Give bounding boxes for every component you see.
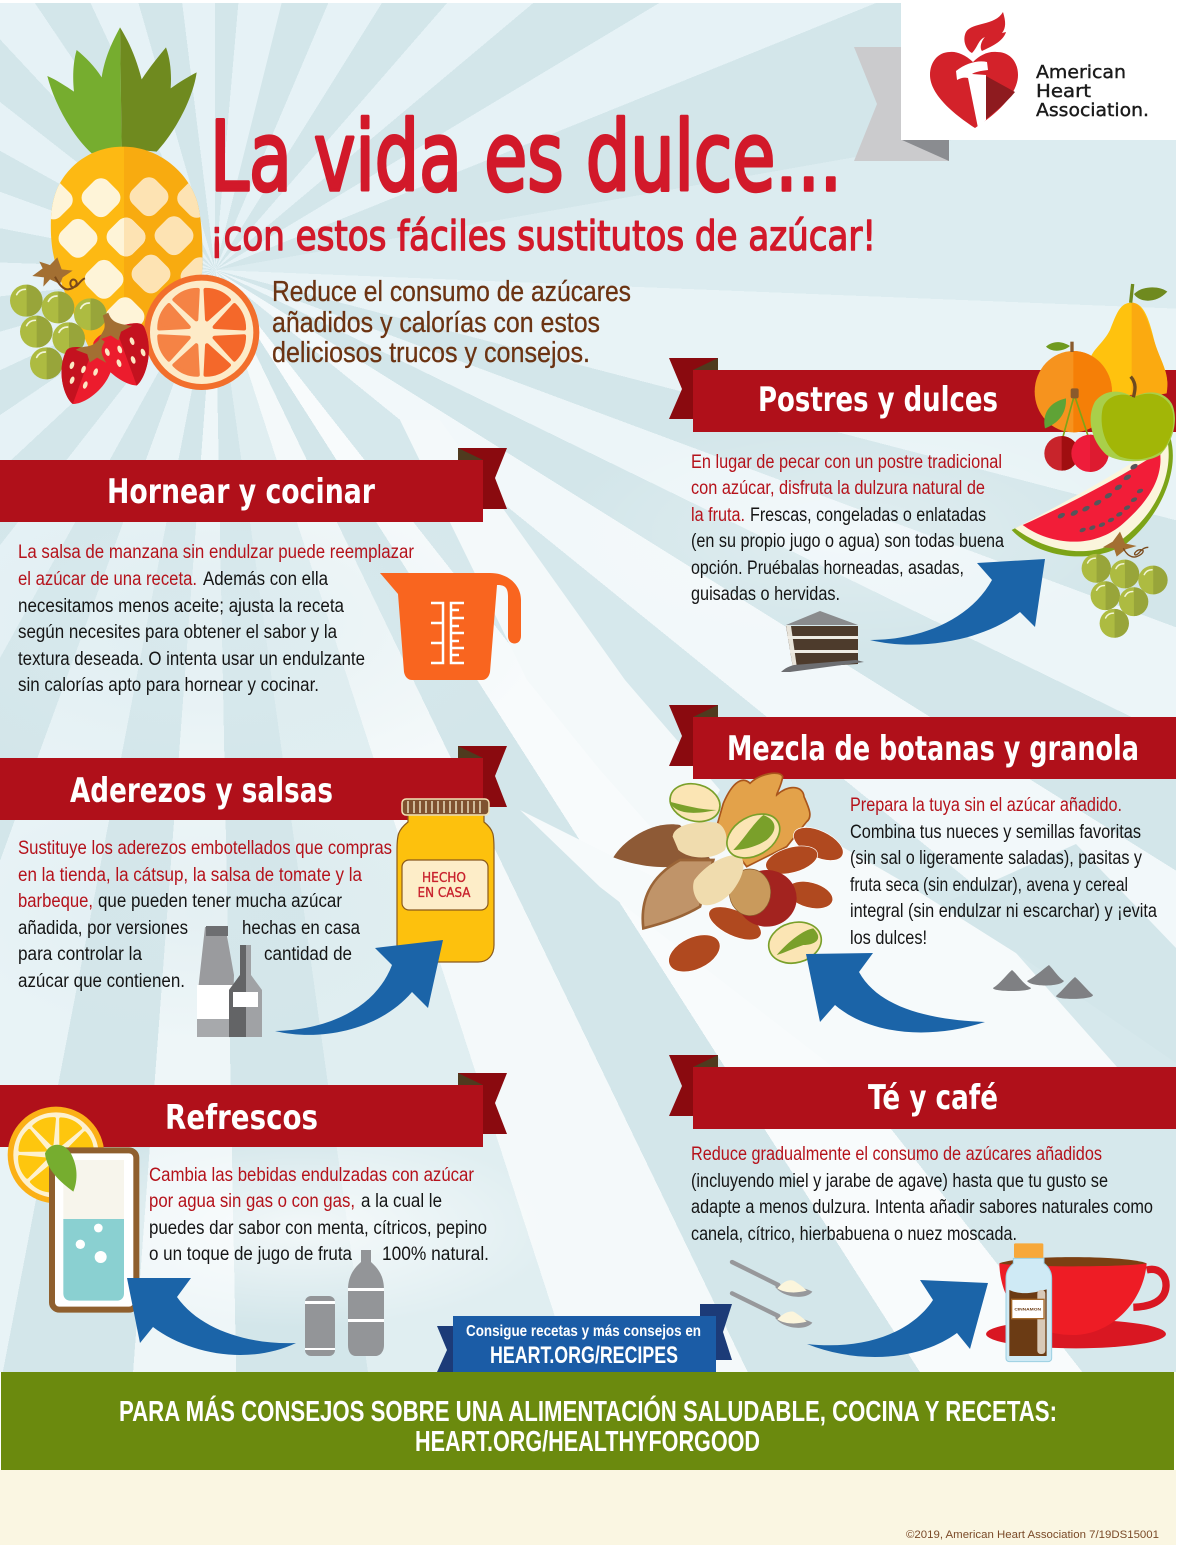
body text: textura deseada. O intenta usar un endulzante [18, 649, 365, 670]
subtitle: ¡con estos fáciles sustitutos de azúcar! [210, 212, 876, 260]
body text: (sin sal o ligeramente saladas), pasitas y [850, 848, 1142, 869]
body text [691, 452, 1004, 605]
cherries [1044, 388, 1109, 472]
icon: spoons of sugar [732, 1262, 812, 1328]
intro text: deliciosos trucos y consejos. [272, 337, 590, 369]
icon: measuring cup [380, 573, 521, 680]
callout: recipes badge: Consigue recetas y más consejos en [466, 1323, 701, 1340]
body text: guisadas o hervidas. [691, 584, 840, 605]
logo: American Heart Association: American [1036, 62, 1126, 83]
banner [669, 358, 1176, 432]
arrow [807, 1280, 988, 1357]
icon: homemade jar [397, 799, 494, 962]
panel: Té y café [669, 1055, 1176, 1362]
body text: en la tienda, la cátsup, la salsa de tomate y la [18, 865, 362, 886]
body text: la fruta. [691, 505, 745, 526]
icon: chocolate chips [993, 965, 1093, 999]
callout: recipes badge: HEART.ORG/RECIPES [490, 1342, 678, 1369]
body text: puedes dar sabor con menta, cítricos, pepino [149, 1218, 487, 1239]
body text: con azúcar, disfruta la dulzura natural de [691, 478, 985, 499]
body text: canela, cítrico, hierbabuena o nuez moscada. [691, 1224, 1017, 1245]
arrow [275, 940, 443, 1035]
body text [18, 838, 392, 992]
body text: necesitamos menos aceite; ajusta la receta [18, 596, 344, 617]
body text: (en su propio jugo o agua) son todas buena [691, 531, 1004, 552]
body text: Además con ella [203, 569, 328, 590]
banner [0, 746, 507, 820]
body text: fruta seca (sin endulzar), avena y cereal [850, 875, 1128, 896]
body text: o un toque de jugo de fruta [149, 1244, 352, 1265]
body text: por agua sin gas o con gas, [149, 1191, 355, 1212]
callout: recipes badge [437, 1304, 732, 1372]
icon: soda can and bottle [305, 1250, 384, 1356]
body text: opción. Pruébalas horneadas, asadas, [691, 558, 964, 579]
body text [850, 795, 1157, 949]
intro text: Reduce el consumo de azúcares [272, 276, 631, 308]
icon: pineapple [47, 28, 202, 346]
body text [149, 1165, 489, 1265]
banner: Postres y dulces [758, 380, 998, 420]
banner [669, 1055, 1176, 1129]
body text: los dulces! [850, 928, 927, 949]
peach [1035, 342, 1112, 432]
body text: hechas en casa [242, 918, 360, 939]
panel: footer call to action: HEART.ORG/HEALTHYFORGOOD [415, 1426, 760, 1458]
body text: barbeque, [18, 891, 93, 912]
footer background [0, 1470, 1176, 1545]
pear [1090, 284, 1167, 400]
panel: Refrescos [0, 1073, 507, 1356]
body text: Frescas, congeladas o enlatadas [750, 505, 986, 526]
panel: footer call to action [1, 1372, 1174, 1470]
icon: strawberries [50, 303, 162, 412]
ribbon behind logo [854, 47, 949, 161]
body text: cantidad de [264, 944, 352, 965]
body text: Reduce gradualmente el consumo de azúcares añadidos [691, 1144, 1102, 1165]
intro text [272, 276, 631, 369]
body text: a la cual le [361, 1191, 442, 1212]
body text: según necesites para obtener el sabor y la [18, 622, 337, 643]
watermelon [1012, 437, 1173, 556]
panel: Hornear y cocinar [0, 448, 521, 696]
panel: Postres y dulces [669, 284, 1176, 672]
banner: Té y café [868, 1078, 998, 1118]
body text: Combina tus nueces y semillas favoritas [850, 822, 1141, 843]
body text: sin calorías apto para hornear y cocinar. [18, 675, 319, 696]
arrow [127, 1278, 296, 1355]
body text [691, 1144, 1153, 1245]
arrow [806, 953, 985, 1032]
panel: Aderezos y salsas [0, 746, 507, 1037]
pineapple with grapes, strawberries and orange [10, 27, 259, 412]
icon: mixed nuts [613, 773, 848, 979]
body text: añadida, por versiones [18, 918, 188, 939]
body text: La salsa de manzana sin endulzar puede reemplazar [18, 542, 415, 563]
grapes [1082, 532, 1168, 638]
banner: Refrescos [165, 1098, 318, 1138]
logo: American Heart Association: Heart [1036, 81, 1091, 102]
body text: azúcar que contienen. [18, 971, 185, 992]
icon: grapes [10, 257, 107, 379]
arrow [870, 559, 1045, 645]
body text: En lugar de pecar con un postre tradicional [691, 452, 1002, 473]
body text: para controlar la [18, 944, 142, 965]
body text: integral (sin endulzar ni escarchar) y ¡evita [850, 901, 1157, 922]
body text: (incluyendo miel y jarabe de agave) hasta que tu gusto se [691, 1171, 1108, 1192]
banner: Hornear y cocinar [107, 472, 375, 512]
body text: Sustituye los aderezos embotellados que compras [18, 838, 392, 859]
logo: American Heart Association [901, 0, 1200, 140]
body text: Cambia las bebidas endulzadas con azúcar [149, 1165, 475, 1186]
icon: fruits [1012, 284, 1175, 638]
body text: 100% natural. [382, 1244, 489, 1265]
banner [0, 1073, 507, 1147]
body text [18, 542, 415, 696]
icon: coffee cup and cinnamon [986, 1243, 1166, 1362]
icon: orange slice [144, 275, 259, 390]
body text: que pueden tener mucha azúcar [98, 891, 343, 912]
banner: Aderezos y salsas [70, 771, 333, 811]
logo: American Heart Association: Association. [1036, 100, 1149, 121]
body text: Prepara la tuya sin el azúcar añadido. [850, 795, 1122, 816]
intro text: añadidos y calorías con estos [272, 307, 600, 339]
title: La vida es dulce... [210, 101, 842, 213]
copyright: ©2019, American Heart Association 7/19DS15001 [906, 1529, 1159, 1541]
panel: Mezcla de botanas y granola [613, 705, 1176, 1032]
background ray overlays (lower right) [400, 420, 1176, 1067]
body text: el azúcar de una receta. [18, 569, 197, 590]
banner [669, 705, 1176, 779]
icon: homemade jar: EN CASA [418, 886, 471, 901]
apple [1091, 377, 1175, 461]
banner [0, 448, 507, 522]
icon: coffee cup and cinnamon: CINNAMON [1014, 1306, 1041, 1311]
icon: cake slice [781, 611, 864, 672]
icon: glass of water with lemon [8, 1107, 136, 1310]
icon: homemade jar: HECHO [422, 871, 466, 886]
icon: bottled dressings [197, 926, 262, 1037]
